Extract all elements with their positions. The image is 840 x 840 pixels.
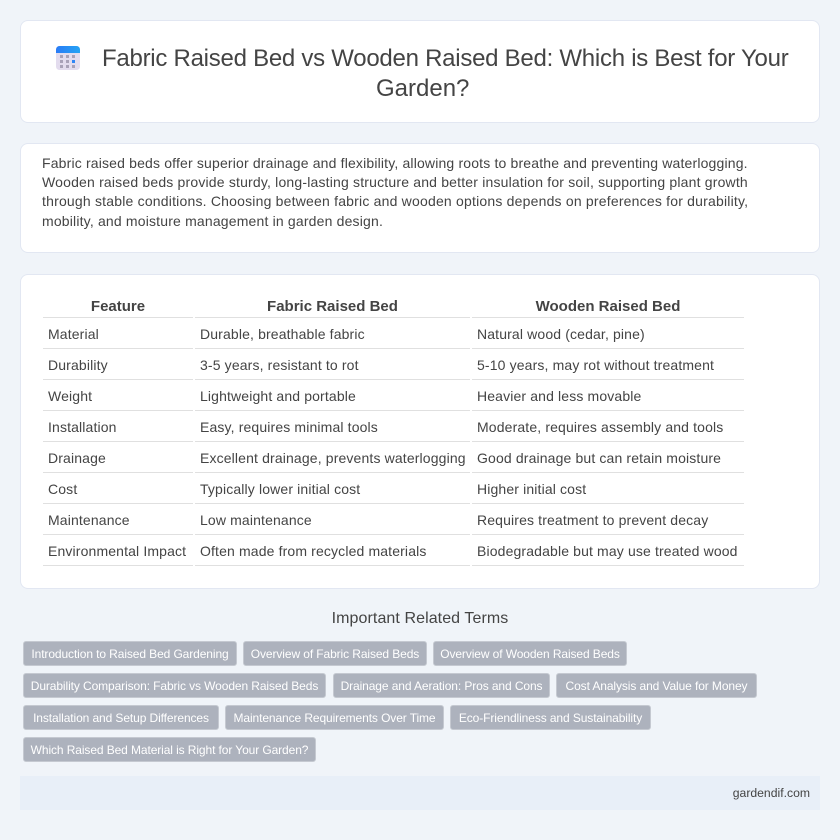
panel: comparison table: Natural wood (cedar, pine): [477, 326, 645, 342]
tag: Introduction to Raised Bed Gardening: [31, 647, 229, 661]
summary paragraph: mobility, and moisture management in garden design.: [42, 213, 383, 229]
tag: [225, 705, 444, 730]
icon: calendar: [56, 46, 80, 70]
footer bar: [20, 776, 820, 810]
row: Drainage: Drainage: [48, 450, 106, 466]
panel: comparison table: 3-5 years, resistant to rot: [200, 357, 359, 373]
panel: comparison table: Heavier and less movable: [477, 388, 641, 404]
row: Material: Material: [48, 326, 99, 342]
title: Garden?: [376, 75, 469, 102]
panel: comparison table: Good drainage but can retain moisture: [477, 450, 721, 466]
panel: comparison table: Low maintenance: [200, 512, 312, 528]
tag: [333, 673, 550, 698]
summary paragraph: through stable conditions. Choosing between fabric and wooden options depends on preferences for durability,: [42, 193, 748, 209]
tag: Overview of Fabric Raised Beds: [251, 647, 419, 661]
panel: summary text: [20, 143, 820, 253]
tag: Eco-Friendliness and Sustainability: [459, 711, 642, 725]
panel: comparison table: Excellent drainage, prevents waterlogging: [200, 450, 466, 466]
tag: Cost Analysis and Value for Money: [566, 679, 747, 693]
tag: [23, 737, 316, 762]
footer source text: gardendif.com: [733, 786, 810, 800]
table header: Wooden Raised Bed: Wooden Raised Bed: [536, 298, 680, 315]
title: [102, 45, 788, 102]
summary paragraph: Wooden raised beds provide sturdy, long-lasting structure and better insulation for soil, supporting plant growth: [42, 174, 748, 190]
row: Weight: Weight: [48, 388, 92, 404]
panel: comparison table: Often made from recycled materials: [200, 543, 427, 559]
tag: [450, 705, 651, 730]
tag: Which Raised Bed Material is Right for Your Garden?: [31, 743, 308, 757]
table header: Fabric Raised Bed: Fabric Raised Bed: [267, 298, 398, 315]
heading: Important Related Terms: Important Related Terms: [332, 610, 508, 627]
summary paragraph: Fabric raised beds offer superior drainage and flexibility, allowing roots to breathe and preventing waterlogging.: [42, 154, 748, 170]
panel: comparison table: Biodegradable but may use treated wood: [477, 543, 738, 559]
panel: comparison table: 5-10 years, may rot without treatment: [477, 357, 714, 373]
tag: [433, 641, 627, 666]
tag: [23, 673, 326, 698]
tags: related terms: [23, 641, 757, 762]
row: Cost: Cost: [48, 481, 77, 497]
panel: comparison table: Durable, breathable fabric: [200, 326, 365, 342]
tag: Installation and Setup Differences: [33, 711, 209, 725]
panel: comparison table: Lightweight and portable: [200, 388, 356, 404]
tag: [23, 705, 219, 730]
row: Environmental Impact: Environmental Impact: [48, 543, 186, 559]
panel: title header: [20, 20, 820, 123]
summary paragraph: [42, 154, 748, 229]
panel: comparison table: Easy, requires minimal tools: [200, 419, 378, 435]
row: Installation: Installation: [48, 419, 117, 435]
tag: [23, 641, 237, 666]
panel: comparison table: Requires treatment to prevent decay: [477, 512, 708, 528]
tag: [243, 641, 427, 666]
tag: Durability Comparison: Fabric vs Wooden Raised Beds: [31, 679, 318, 693]
tag: Drainage and Aeration: Pros and Cons: [341, 679, 542, 693]
row: Maintenance: Maintenance: [48, 512, 130, 528]
table header: Feature: Feature: [91, 298, 145, 315]
panel: comparison table: [20, 274, 820, 589]
row: Durability: Durability: [48, 357, 108, 373]
tag: Overview of Wooden Raised Beds: [440, 647, 620, 661]
panel: comparison table: Moderate, requires assembly and tools: [477, 419, 723, 435]
panel: comparison table: Typically lower initial cost: [200, 481, 360, 497]
panel: comparison table: Higher initial cost: [477, 481, 586, 497]
tag: [556, 673, 757, 698]
tag: Maintenance Requirements Over Time: [233, 711, 436, 725]
title: Fabric Raised Bed vs Wooden Raised Bed: Which is Best for Your: [102, 45, 788, 72]
